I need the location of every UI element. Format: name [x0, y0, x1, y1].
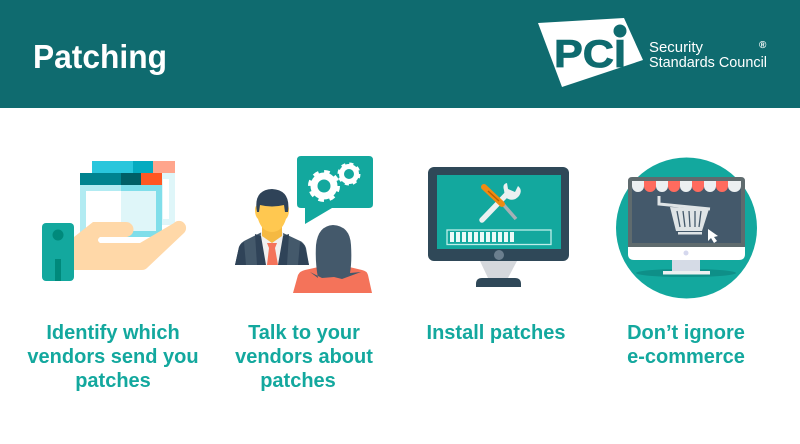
logo: PCI Security Standards Council: Security [649, 40, 704, 56]
label: talk to vendors: Talk to your [248, 322, 360, 344]
icon: two people talking with gears [235, 156, 373, 293]
label line 2: vendors send you [27, 346, 199, 368]
label: don't ignore e-commerce: Don’t ignore [627, 322, 745, 344]
label line 2: vendors about [235, 346, 373, 368]
label line 3: patches [75, 370, 151, 392]
title: Patching [33, 38, 167, 75]
logo: PCI Security Standards Council: Standards Council [649, 55, 767, 71]
header band [0, 0, 800, 108]
logo: PCI Security Standards Council: PCI [554, 33, 626, 76]
logo: PCI Security Standards Council: ® [759, 40, 767, 51]
label line 3: patches [260, 370, 336, 392]
icon: hand holding windows [42, 161, 186, 281]
icon: monitor with tools and progress bar [428, 167, 569, 287]
icon: e-commerce shop monitor [616, 158, 757, 298]
logo: PCI Security Standards Council [538, 18, 767, 87]
label: install patches: Install patches [427, 322, 565, 344]
label line 2: e-commerce [627, 346, 745, 368]
label: identify vendors: Identify which [46, 322, 180, 344]
